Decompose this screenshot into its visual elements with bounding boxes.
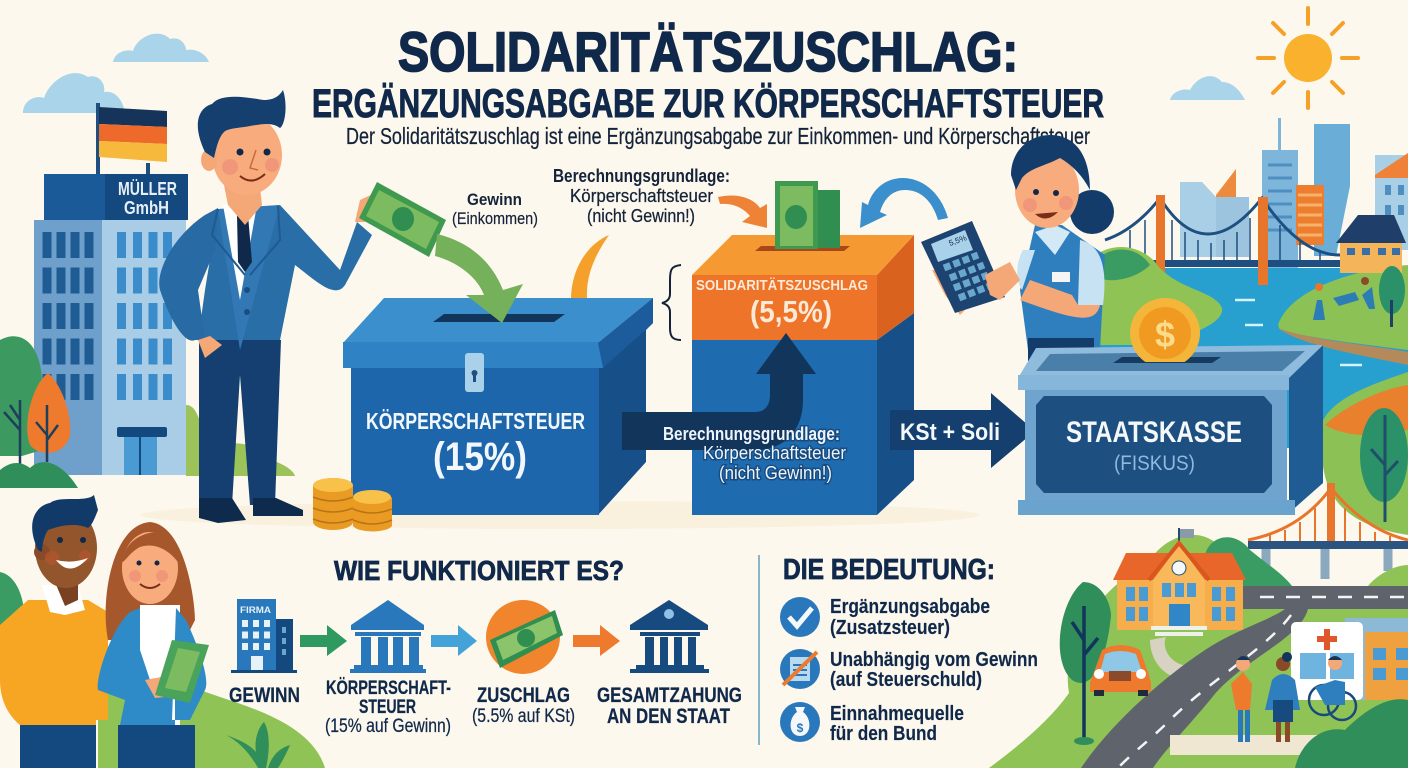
title bbox=[312, 20, 1104, 126]
flow labels bbox=[229, 678, 742, 737]
lower right scene: town bbox=[989, 483, 1408, 768]
bracket bbox=[662, 265, 681, 340]
box text: (FISKUS) bbox=[1114, 452, 1195, 475]
arrow: KSt + Soli: KSt + Soli bbox=[900, 419, 1000, 446]
flow labels: (15% auf Gewinn) bbox=[325, 716, 451, 737]
calculator bbox=[921, 221, 1005, 313]
arrow: light blue bbox=[431, 625, 477, 656]
flow labels: ZUSCHLAG bbox=[477, 684, 570, 707]
people bbox=[1231, 652, 1356, 742]
icon: calculator crossed bbox=[780, 649, 820, 689]
icon: surcharge banknote bbox=[486, 600, 563, 674]
icon: bank dark bbox=[630, 600, 709, 673]
heading: Wie funktioniert es: WIE FUNKTIONIERT ES? bbox=[334, 555, 624, 586]
box text: (5,5%) bbox=[750, 294, 832, 329]
cloud: top centre bbox=[113, 34, 209, 62]
box text: (15%) bbox=[433, 435, 527, 479]
list: Bedeutung: Ergänzungsabgabe bbox=[830, 596, 990, 618]
coins bbox=[313, 478, 392, 531]
cloud: right bbox=[1170, 76, 1245, 100]
flow labels: GESAMTZAHUNG bbox=[597, 684, 742, 707]
cloud: left bbox=[23, 73, 125, 113]
overlay text: Körperschaftsteuer bbox=[703, 443, 846, 463]
sign text: MÜLLER bbox=[118, 179, 177, 199]
flow labels: KÖRPERSCHAFT- bbox=[326, 678, 451, 699]
arrow: KSt + Soli bbox=[890, 393, 1035, 468]
banknote in hand bbox=[359, 182, 446, 257]
flag: Germany bbox=[96, 103, 167, 175]
list: Bedeutung: Unabhängig vom Gewinn bbox=[830, 649, 1038, 671]
arrow: dark up-curved bbox=[622, 333, 816, 450]
box text: KÖRPERSCHAFTSTEUER bbox=[366, 408, 585, 434]
box text: SOLIDARITÄTSZUSCHLAG bbox=[696, 277, 868, 294]
coin bbox=[1130, 298, 1200, 368]
box: Solidaritätszuschlag bbox=[622, 181, 914, 515]
couple at lower left bbox=[0, 495, 325, 768]
icon: Firma building bbox=[231, 599, 297, 673]
flow labels: GEWINN bbox=[229, 684, 300, 707]
banknotes bbox=[775, 181, 840, 249]
title: ERGÄNZUNGSABGABE ZUR KÖRPERSCHAFTSTEUER bbox=[312, 81, 1104, 126]
coin: $ bbox=[1155, 314, 1175, 355]
arrow: green bbox=[300, 625, 347, 656]
overlay text: Berechnungsgrundlage: bbox=[663, 424, 840, 444]
right landscape: city, bridge, river bbox=[1090, 118, 1408, 535]
icon: sun bbox=[1258, 8, 1358, 108]
sign text bbox=[118, 179, 177, 218]
arrow: green curved into box bbox=[435, 234, 523, 323]
school bbox=[1113, 528, 1246, 636]
icon: money bag bbox=[780, 702, 820, 742]
heading: Die Bedeutung: DIE BEDEUTUNG: bbox=[783, 554, 995, 586]
box text bbox=[366, 408, 585, 479]
calculator: 5,5% bbox=[948, 233, 968, 248]
list: Bedeutung: (Zusatzsteuer) bbox=[830, 617, 950, 639]
icon: money bag: $ bbox=[797, 721, 804, 735]
icon: check bbox=[780, 597, 820, 637]
icon: bank blue bbox=[350, 600, 426, 673]
overlay text: (nicht Gewinn!) bbox=[719, 463, 832, 483]
box: Körperschaftsteuer bbox=[343, 298, 653, 515]
woman with calculator bbox=[921, 135, 1114, 372]
man with banknote bbox=[159, 90, 376, 523]
label: Berechnungsgrundlage top bbox=[553, 166, 730, 226]
ground shadow bbox=[140, 501, 980, 529]
bush bbox=[1295, 699, 1408, 768]
title: SOLIDARITÄTSZUSCHLAG: bbox=[398, 20, 1018, 83]
list: Bedeutung bbox=[830, 596, 1038, 745]
label: Gewinn bbox=[452, 190, 538, 228]
bridge lower bbox=[1248, 483, 1408, 579]
arrow: blue curved bbox=[860, 178, 948, 228]
car bbox=[1090, 645, 1151, 696]
box text: STAATSKASSE bbox=[1066, 416, 1242, 449]
flow labels: AN DEN STAAT bbox=[607, 705, 730, 728]
label: Gewinn: Gewinn bbox=[467, 190, 522, 209]
label: Berechnungsgrundlage top: (nicht Gewinn!) bbox=[587, 206, 695, 226]
label: Berechnungsgrundlage top: Körperschaftsteuer bbox=[570, 186, 713, 206]
box text bbox=[696, 277, 868, 329]
road bbox=[1081, 586, 1408, 768]
subtitle: Der Solidaritätszuschlag ist eine Ergänzungsabgabe zur Einkommen- und Körperschaftsteuer bbox=[346, 123, 1090, 149]
box: Staatskasse bbox=[1018, 345, 1323, 515]
arrow: orange bbox=[573, 625, 620, 656]
building: Müller GmbH bbox=[34, 103, 188, 475]
list: Bedeutung: für den Bund bbox=[830, 723, 937, 745]
overlay text bbox=[663, 424, 846, 483]
flow labels: STEUER bbox=[359, 697, 416, 718]
list: Bedeutung: Einnahmequelle bbox=[830, 703, 964, 725]
sign text: GmbH bbox=[124, 198, 169, 218]
lock bbox=[465, 353, 484, 392]
label: Berechnungsgrundlage top: Berechnungsgrundlage: bbox=[553, 166, 730, 186]
arrow: small orange bbox=[718, 195, 767, 228]
flow labels: (5.5% auf KSt) bbox=[472, 706, 575, 727]
trees: left bbox=[0, 336, 295, 488]
hospital bbox=[1291, 618, 1408, 700]
icon: Firma building: FIRMA bbox=[240, 605, 272, 615]
list: Bedeutung: (auf Steuerschuld) bbox=[830, 669, 982, 691]
label: Gewinn: (Einkommen) bbox=[452, 209, 538, 228]
tree bbox=[1060, 582, 1111, 745]
arrow: orange crescent bbox=[571, 235, 609, 298]
box text bbox=[1066, 416, 1242, 475]
